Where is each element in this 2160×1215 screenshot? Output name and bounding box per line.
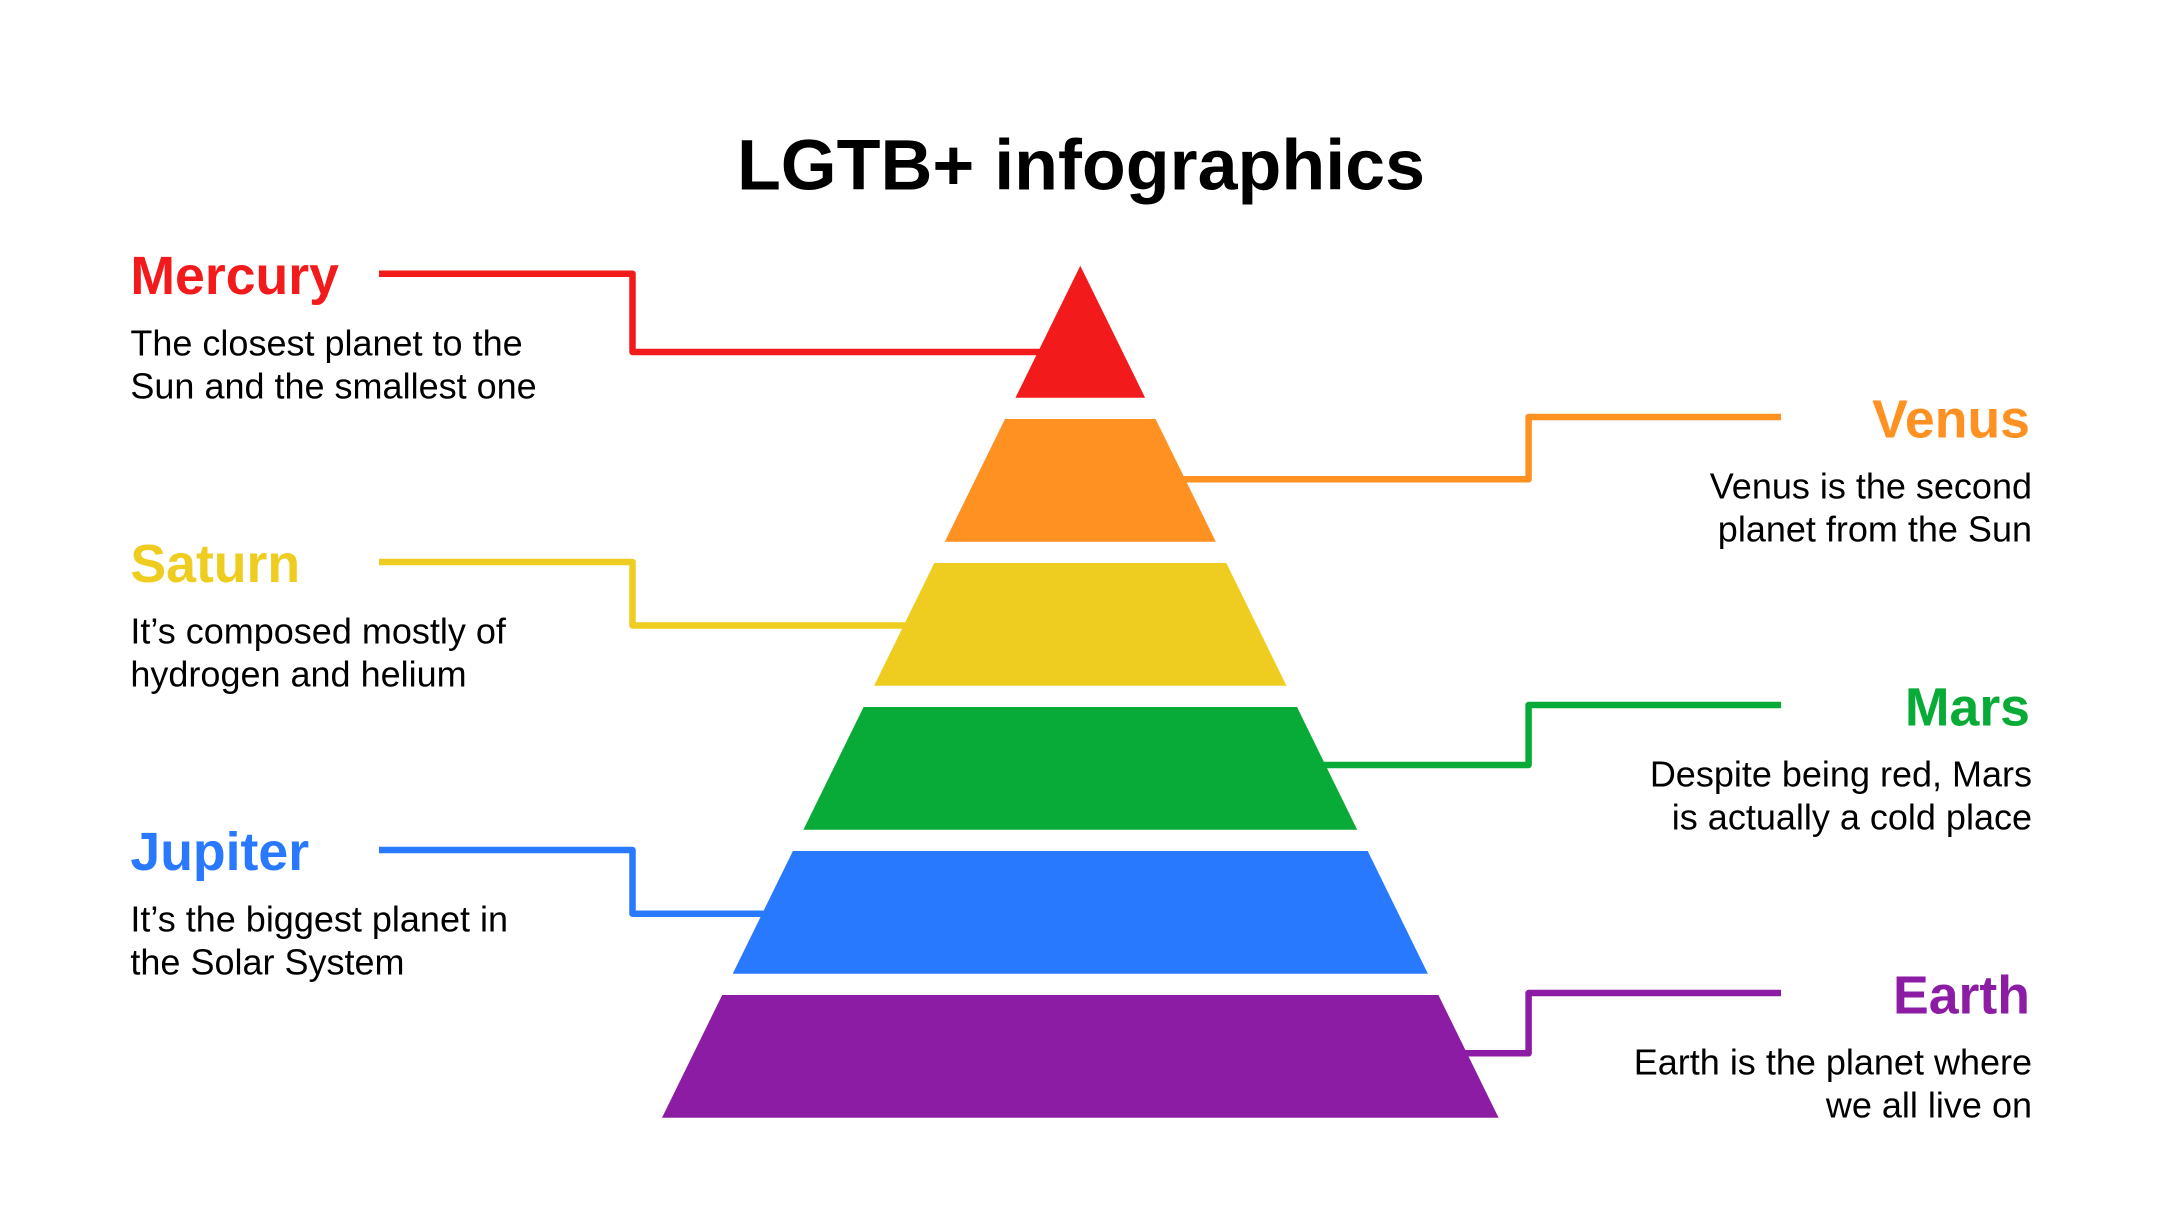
label: Venus: Venus is the second — [1710, 466, 2032, 507]
label: Jupiter: It’s the biggest planet in — [130, 899, 508, 940]
pyramid — [662, 266, 1499, 1118]
label: Mercury — [130, 246, 537, 407]
pyramid tier: orange — [945, 419, 1216, 542]
label: Saturn: It’s composed mostly of — [130, 611, 507, 652]
label: Mercury: Sun and the smallest one — [130, 366, 537, 407]
connector: Earth — [1450, 993, 1781, 1053]
label: Venus: planet from the Sun — [1718, 509, 2032, 550]
label: Jupiter: Jupiter — [130, 822, 309, 882]
pyramid tier: green — [803, 707, 1357, 830]
pyramid tier: blue — [733, 851, 1428, 974]
label: Earth: we all live on — [1825, 1085, 2032, 1126]
label: Mars — [1650, 678, 2032, 838]
label: Jupiter — [130, 822, 508, 983]
connector: Jupiter — [379, 850, 780, 914]
label: Mars: Despite being red, Mars — [1650, 754, 2032, 795]
pyramid tier: red — [1016, 266, 1145, 398]
label: Earth: Earth — [1893, 966, 2030, 1026]
pyramid tier: yellow — [874, 563, 1286, 686]
title: LGTB+ infographics — [737, 126, 1425, 206]
label: Mercury: Mercury — [130, 246, 339, 306]
label: Earth: Earth is the planet where — [1634, 1042, 2032, 1083]
label: Earth — [1634, 966, 2032, 1126]
connector: Mars — [1310, 705, 1781, 765]
label: Mercury: The closest planet to the — [130, 323, 523, 364]
label: Saturn: hydrogen and helium — [130, 654, 467, 695]
label: Jupiter: the Solar System — [130, 942, 405, 983]
label: Mars: is actually a cold place — [1672, 797, 2032, 838]
label: Saturn — [130, 534, 507, 695]
connector: Saturn — [379, 562, 920, 626]
connector: Venus — [1170, 417, 1781, 479]
connector: Mercury — [379, 274, 1060, 352]
pyramid tier: purple — [662, 995, 1499, 1118]
label: Venus — [1710, 390, 2032, 550]
label: Mars: Mars — [1905, 678, 2030, 738]
label: Saturn: Saturn — [130, 534, 300, 594]
label: Venus: Venus — [1872, 390, 2030, 450]
